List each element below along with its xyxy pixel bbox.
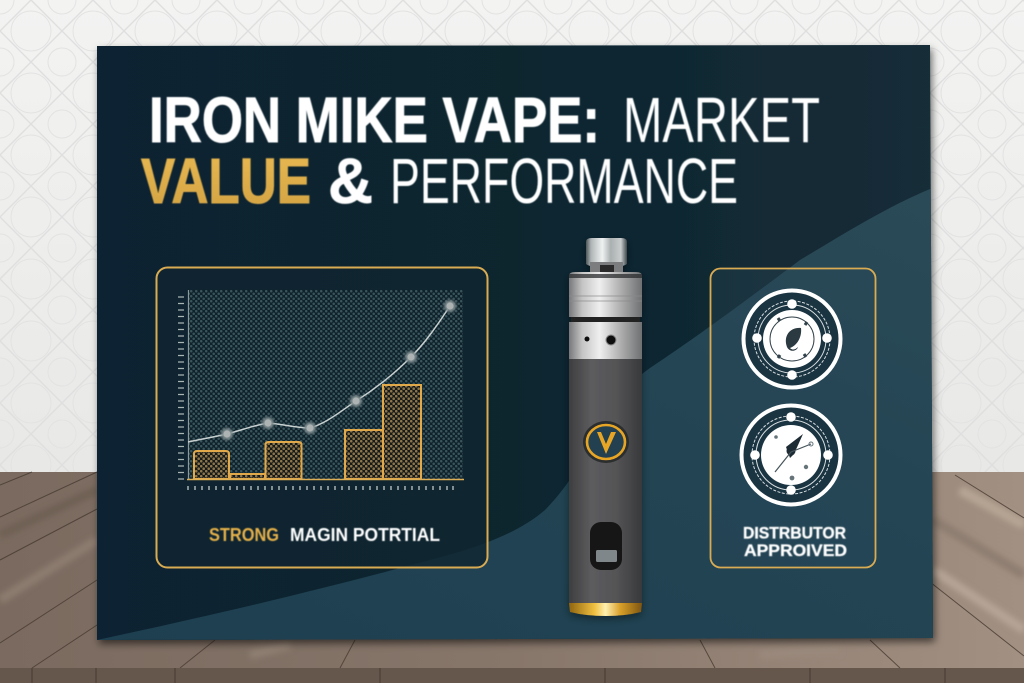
device body: [569, 359, 642, 603]
panel caption: DISTRBUTOR: [743, 524, 846, 542]
logo badge: [583, 421, 629, 463]
bars: [194, 385, 421, 479]
panel: market chart: [156, 268, 488, 568]
title: [141, 84, 820, 217]
x axis with ticks: [187, 480, 464, 490]
panel frame: [710, 268, 876, 568]
chart caption: STRONG: [209, 524, 279, 545]
metal collar: [569, 272, 642, 317]
chart caption: MAGIN POTRTIAL: [290, 524, 440, 545]
background wall: [0, 0, 1024, 473]
icon: compass seal badge: [744, 290, 840, 388]
title: PERFORMANCE: [390, 145, 738, 217]
trend line with markers: [188, 300, 456, 442]
glass tank: [586, 238, 627, 268]
y axis with ticks: [178, 290, 188, 479]
wooden table: [0, 472, 1024, 683]
panel caption: [743, 524, 847, 560]
vape device: [569, 238, 642, 616]
panel frame: [156, 268, 488, 568]
board background: [97, 45, 933, 640]
chart caption: [209, 524, 440, 545]
lighter diagonal area: [97, 187, 935, 640]
title: IRON MIKE VAPE:: [149, 84, 600, 156]
icon: gauge seal badge: [742, 406, 840, 504]
gold base: [569, 603, 642, 616]
panel caption: APPROIVED: [744, 541, 847, 560]
metal airflow ring: [569, 322, 642, 359]
display board: [97, 45, 935, 640]
title: MARKET: [623, 84, 820, 156]
hatched plot area: [189, 290, 463, 479]
panel: distributor approved: [710, 268, 876, 568]
title: &: [328, 145, 373, 217]
fire switch: [590, 522, 622, 570]
title: VALUE: [141, 145, 311, 217]
